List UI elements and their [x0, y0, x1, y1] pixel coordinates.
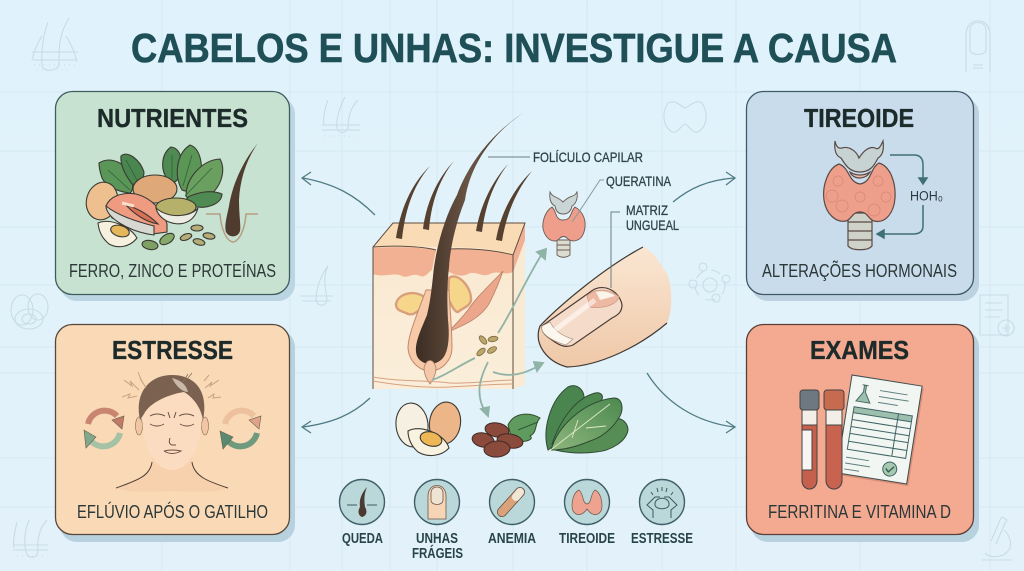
panel: exames	[746, 324, 979, 542]
decorative icon: molecule	[689, 263, 730, 302]
label: queratina: QUERATINA	[606, 173, 672, 189]
label: HOH0: HOH₀	[910, 188, 943, 204]
label: unhas frageis: FRÁGEIS	[412, 545, 463, 562]
decorative icon: hair lower middle	[300, 266, 333, 305]
label: unhas frageis: UNHAS	[416, 531, 458, 547]
panel: nutrientes	[56, 92, 295, 301]
icon: feedback arrows	[877, 155, 927, 238]
sebaceous glands	[396, 276, 471, 314]
panel: tireoide	[746, 92, 979, 301]
icon: finger and nail	[538, 247, 671, 367]
green arrows	[432, 249, 546, 416]
icon: spinach	[546, 386, 628, 453]
text: alteracoes: ALTERAÇÕES HORMONAIS	[762, 260, 957, 281]
skin cross-section	[373, 113, 532, 389]
icon: queda	[340, 480, 384, 524]
icon: stressed face	[116, 373, 228, 492]
follicle sheath	[408, 290, 452, 371]
text: efluvio: EFLÚVIO APÓS O GATILHO	[77, 501, 268, 522]
arrow: to estresse	[302, 398, 370, 433]
label: queda: QUEDA	[342, 531, 383, 547]
heading: exames: EXAMES	[810, 337, 909, 365]
label: matriz ungueal: UNGUEAL	[626, 217, 679, 233]
icon: cycle right	[220, 411, 261, 449]
icon: anemia	[490, 480, 534, 524]
small hairs	[396, 161, 532, 241]
arrector muscle	[448, 271, 503, 332]
label: foliculo capilar: FOLÍCULO CAPILAR	[533, 149, 643, 165]
decorative icon: ovals left	[11, 294, 48, 329]
text: ferritina: FERRITINA E VITAMINA D	[768, 501, 951, 522]
icon: foods	[82, 145, 223, 251]
label: unhas frageis	[412, 531, 463, 562]
decorative icon: hair lower left	[13, 520, 48, 557]
label: matriz ungueal	[611, 202, 679, 288]
icon: thyroid gland	[824, 141, 895, 250]
decorative icon: hair top left	[32, 18, 78, 70]
decorative icon: hair upper middle	[322, 97, 360, 136]
panel: estresse	[56, 324, 295, 542]
icon: unhas	[414, 480, 460, 524]
label: queratina	[572, 173, 672, 222]
icon: eggs	[394, 400, 463, 455]
icon: stress sparks	[122, 372, 221, 398]
label: tireoide: TIREOIDE	[559, 531, 615, 547]
arrow: to nutrientes	[302, 172, 375, 215]
symptom icons	[340, 480, 693, 562]
big hair	[416, 113, 523, 364]
decorative icon: thyroid upper middle	[664, 102, 706, 132]
heading: tireoide: TIREOIDE	[804, 105, 914, 133]
decorative icon: microscope	[982, 517, 1012, 560]
icon: blood tube grey	[800, 390, 819, 489]
icon: tireoide	[564, 480, 610, 524]
title: CABELOS E UNHAS: INVESTIGUE A CAUSA	[131, 25, 897, 71]
seeds	[475, 334, 498, 357]
decorative icon: nail top right	[966, 21, 990, 72]
decorative icon: document	[980, 295, 1014, 336]
label: estresse: ESTRESSE	[631, 531, 693, 547]
icon: cycle left	[84, 411, 124, 448]
arrow: to tireoide	[673, 172, 735, 202]
label: matriz ungueal: MATRIZ	[626, 202, 668, 218]
icon: lab report	[836, 375, 924, 486]
icon: thyroid small	[543, 192, 585, 257]
label: anemia: ANEMIA	[488, 531, 536, 547]
text: ferro: FERRO, ZINCO E PROTEÍNAS	[69, 260, 276, 281]
heading: nutrientes: NUTRIENTES	[97, 105, 248, 133]
icon: estresse	[640, 480, 684, 524]
icon: beans	[471, 414, 540, 458]
arrow: to exames	[647, 373, 735, 433]
heading: estresse: ESTRESSE	[112, 337, 233, 365]
icon: blood tube red	[824, 390, 844, 489]
icon: hair follicle	[206, 143, 258, 242]
